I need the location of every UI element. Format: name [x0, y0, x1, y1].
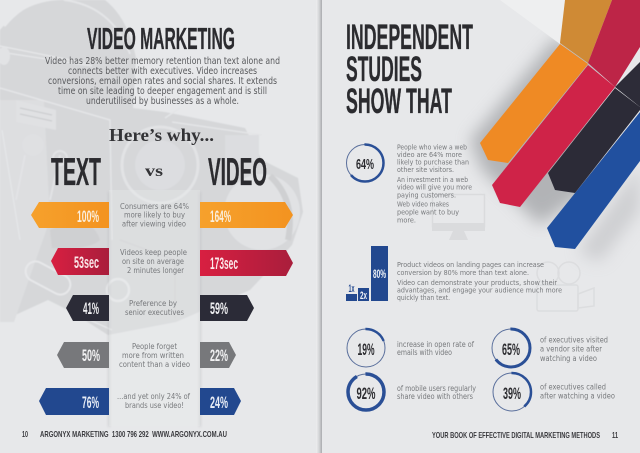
stat text: 65%: of executives visited — [540, 336, 608, 344]
ribbon shadow — [470, 0, 640, 262]
text block: web video: people want to buy — [397, 208, 460, 216]
stat ring: 19% — [347, 329, 385, 367]
stat ring: 64% — [346, 144, 384, 182]
comparison: red row: on site on average — [122, 257, 184, 266]
heading: text: TEXT — [51, 151, 101, 194]
stat text: 39%: of executives called — [540, 382, 606, 392]
text: VIDEO — [208, 151, 267, 194]
left page camera background — [0, 0, 303, 335]
comparison: orange row: Consumers are 64% — [120, 202, 189, 211]
comparison: orange row: after viewing video — [122, 220, 186, 228]
comparison: dark row: 41% — [83, 299, 99, 318]
stat ring: 64%: 64% — [356, 156, 374, 173]
stat text: 65%: a vendor site after — [540, 344, 603, 354]
footer right: 11 — [612, 430, 618, 440]
text block: web video: People who view a web — [397, 142, 467, 152]
comparison: dark row: 59% — [210, 299, 228, 318]
spine — [316, 0, 322, 453]
stat text: 39%: after watching a video — [540, 392, 615, 400]
bar chart: 1x 2x 80%: 1x — [348, 283, 355, 295]
intro text block: conversions, email open rates and social shares. It extends — [48, 76, 277, 87]
comparison: grey row: content than a video — [119, 360, 190, 369]
text block: product videos: conversion by 80% more than text alone. — [397, 268, 529, 277]
title: independent studies show that: INDEPENDENT — [346, 18, 473, 57]
subheading: here's why: Here’s why... — [109, 125, 214, 145]
comparison: blue row: ...and yet only 24% of — [117, 392, 190, 401]
comparison: grey row: 22% — [210, 346, 228, 365]
icon: video camera — [537, 262, 594, 311]
intro text block — [45, 56, 280, 107]
comparison: red row: 173sec — [210, 254, 238, 273]
text block: web video: An investment in a web — [397, 175, 468, 184]
stat ring: 65%: 65% — [502, 340, 520, 359]
title: independent studies show that: SHOW THAT — [346, 82, 452, 121]
intro text block: underutilised by businesses as a whole. — [86, 96, 239, 107]
comparison: red row: 53sec — [74, 253, 99, 272]
text block: web video: more. — [397, 216, 416, 224]
footer left — [22, 429, 227, 439]
intro text block: time on site leading to deeper engagement and is still — [58, 86, 267, 97]
stat text: 39% — [540, 382, 615, 400]
centre column — [108, 190, 201, 427]
stat text: 19%: emails with video — [397, 348, 452, 357]
stat text: 92% — [397, 384, 476, 401]
stat text: 65% — [540, 336, 608, 363]
comparison: dark row — [66, 295, 254, 321]
comparison: orange row: 100% — [77, 207, 99, 226]
icon: monitor — [432, 194, 485, 240]
intro text block: Video has 28% better memory retention than text alone and — [45, 56, 280, 67]
stat ring: 65% — [492, 329, 530, 367]
comparison: grey row — [57, 342, 236, 369]
bar chart: 1x 2x 80%: 2x — [360, 290, 367, 302]
stat text: 65%: watching a video — [540, 354, 597, 363]
footer left: 10 — [22, 429, 28, 439]
comparison: dark row: senior executives — [125, 308, 184, 317]
bar chart: 1x 2x 80%: 80% — [373, 267, 386, 281]
text block: product videos: quickly than text. — [397, 293, 450, 302]
stat text: 92%: share video with others — [397, 392, 473, 401]
stat text: 19% — [397, 340, 474, 357]
comparison: red row: Videos keep people — [120, 248, 187, 257]
text block: web video: paying customers. — [397, 190, 456, 200]
text block: product videos — [397, 260, 562, 302]
comparison: grey row: more from written — [122, 351, 184, 360]
text block: web video: other site visitors. — [397, 165, 454, 174]
footer left: ARGONYX MARKETING 1300 796 292 WWW.ARGONYX.COM.AU — [40, 429, 227, 439]
text block: web video: video will give you more — [397, 182, 472, 192]
stat ring: 19%: 19% — [358, 340, 374, 359]
comparison: red row: 2 minutes longer — [127, 266, 185, 275]
stat ring: 39% — [493, 373, 531, 411]
comparison: orange row — [31, 202, 293, 228]
stat text: 92%: of mobile users regularly — [397, 384, 476, 393]
comparison: blue row — [39, 388, 241, 415]
text block: web video: Web video makes — [397, 200, 449, 208]
stat ring: 92%: 92% — [356, 384, 376, 403]
comparison: blue row: brands use video! — [125, 401, 184, 410]
text block: web video: video are 64% more — [397, 150, 462, 159]
intro text block: connects better with executives. Video increases — [68, 66, 257, 77]
comparison: orange row: 164% — [210, 207, 231, 226]
comparison: blue row: 24% — [210, 393, 228, 412]
heading: vs: vs — [145, 163, 163, 180]
comparison: orange row: more likely to buy — [124, 210, 185, 220]
title: independent studies show that — [346, 18, 473, 121]
bar chart: 1x 2x 80% — [346, 246, 388, 302]
text block: product videos: Product videos on landing pages can increase — [397, 260, 544, 269]
comparison: red row — [51, 248, 293, 276]
title: independent studies show that: STUDIES — [346, 50, 422, 89]
comparison: grey row: People forget — [132, 342, 177, 351]
stat ring: 39%: 39% — [503, 384, 521, 403]
text block: product videos: advantages, and engage your audience much more — [397, 286, 562, 294]
comparison: grey row: 50% — [82, 346, 100, 365]
decorative ribbons — [480, 0, 640, 249]
comparison: dark row: Preference by — [129, 299, 177, 308]
stat text: 19%: increase in open rate of — [397, 340, 474, 349]
text block: web video: likely to purchase than — [397, 158, 469, 166]
title: video marketing: VIDEO MARKETING — [87, 21, 235, 56]
text block: web video — [397, 142, 472, 224]
comparison: blue row: 76% — [82, 393, 99, 412]
text block: product videos: Video can demonstrate your products, show their — [397, 278, 558, 287]
stat ring: 92% — [348, 374, 384, 410]
